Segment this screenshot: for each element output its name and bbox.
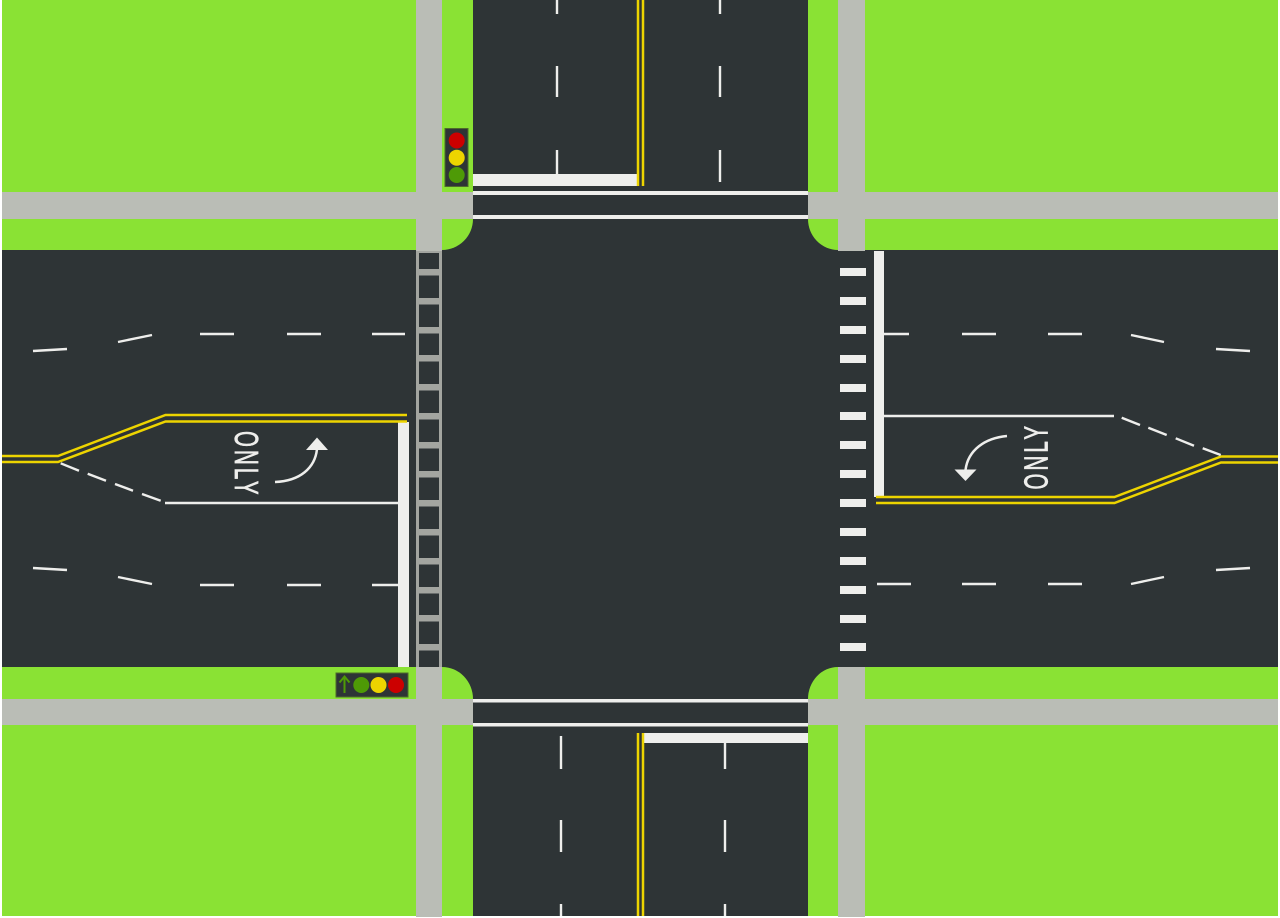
- crosswalk: west ladder: [416, 251, 442, 667]
- lane dashes: north: [557, 0, 720, 182]
- center line: west: [2, 415, 407, 462]
- lane dashes: west upper: [33, 334, 405, 351]
- crosswalk: east bars: [840, 268, 866, 651]
- lane dashes: east upper: [884, 334, 1250, 351]
- grass: top right: [808, 0, 1278, 250]
- signal: red: [388, 677, 404, 693]
- signal: yellow: [449, 150, 465, 166]
- signal: green: [353, 677, 369, 693]
- stop bar: west: [398, 422, 409, 667]
- crosswalk: north lines: [473, 191, 808, 219]
- turn lane line: west: [61, 463, 398, 503]
- sidewalk: top left horizontal: [2, 192, 473, 219]
- sidewalk: bottom left horizontal: [2, 699, 473, 725]
- signal: red: [449, 132, 465, 148]
- sidewalk: bottom left vertical: [416, 667, 442, 917]
- stop bar: north: [473, 174, 637, 186]
- sidewalk: bottom right horizontal: [808, 699, 1278, 725]
- arrow: east left turn: [954, 436, 1007, 481]
- sidewalk: bottom right vertical: [838, 667, 865, 917]
- stop bars: [398, 174, 884, 743]
- traffic light: vertical: [445, 128, 468, 186]
- sidewalk: top left vertical: [416, 0, 442, 251]
- stop bar: east: [874, 251, 884, 497]
- center line: north: [638, 0, 643, 186]
- signal: yellow: [370, 677, 386, 693]
- grass: bottom right: [808, 667, 1278, 916]
- text: ONLY east: ONLY: [1017, 423, 1055, 490]
- lane dashes: south: [561, 736, 725, 916]
- sidewalk: top right vertical: [838, 0, 865, 251]
- arrow: west left turn: [275, 438, 328, 482]
- text: ONLY west: ONLY: [228, 431, 265, 498]
- traffic light: horizontal with turn arrow: [336, 673, 408, 697]
- turn lane line: east: [884, 416, 1221, 455]
- center line: south: [638, 733, 643, 916]
- lane dashes: east lower: [877, 568, 1250, 584]
- crosswalk: south lines: [473, 699, 808, 726]
- signal: green: [449, 167, 465, 183]
- grass: bottom left: [2, 667, 473, 916]
- lane dashes: west lower: [33, 568, 398, 585]
- sidewalk: top right horizontal: [808, 192, 1278, 219]
- center line: east: [876, 456, 1278, 503]
- stop bar: south: [644, 733, 808, 743]
- grass: top left: [2, 0, 473, 250]
- signal: green arrow: [340, 676, 350, 693]
